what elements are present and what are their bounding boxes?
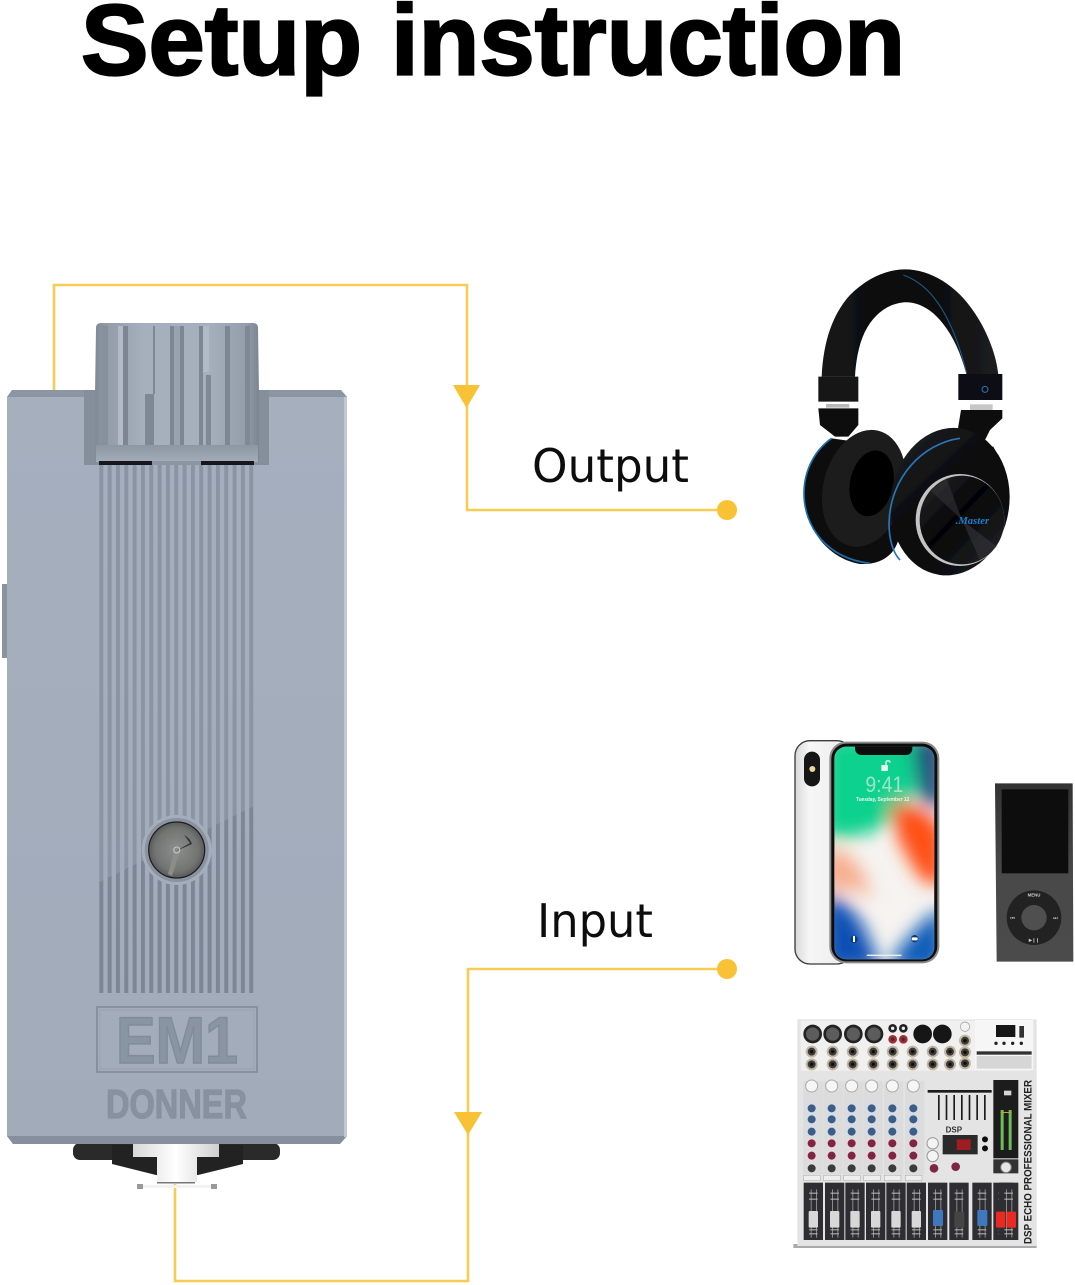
rear connector panel — [801, 1020, 1033, 1071]
arrow: input connector — [175, 959, 737, 1281]
click wheel — [1007, 890, 1061, 945]
center effects section — [927, 1090, 992, 1173]
device: EM1 amplifier — [2, 323, 347, 1189]
jack and nuts — [73, 1143, 280, 1189]
home bar — [867, 955, 902, 956]
arrow: output connector — [54, 285, 737, 520]
brand mark: .Master — [956, 516, 990, 527]
side button — [2, 584, 7, 658]
title — [81, 0, 905, 96]
rear camera — [804, 752, 820, 786]
left ear cup — [804, 421, 918, 564]
DONNER logo: DONNER — [106, 1081, 247, 1127]
label: output: Output — [532, 439, 689, 493]
lock screen clock: 9:41 — [865, 772, 903, 797]
phone back — [795, 741, 852, 964]
notch — [855, 746, 912, 755]
lock icon — [886, 761, 890, 765]
click wheel: ▶❙❙ — [1029, 937, 1039, 942]
click wheel: ⏮ — [1010, 915, 1015, 921]
click wheel: MENU — [1028, 893, 1040, 898]
click wheel: ⏭ — [1053, 915, 1058, 921]
knob — [95, 323, 259, 465]
player screen — [1002, 789, 1068, 873]
right ear cup — [881, 420, 1019, 583]
power button — [142, 815, 212, 885]
audio mixer — [793, 1019, 1037, 1248]
body shell — [7, 390, 347, 1144]
headband — [822, 269, 998, 377]
main meter panel — [993, 1080, 1018, 1173]
lock screen date: Tuesday, September 12 — [856, 797, 909, 803]
vent stripes — [99, 465, 254, 993]
smartphone — [795, 737, 943, 970]
mixer side label: DSP ECHO PROFESSIONAL MIXER — [1023, 1080, 1035, 1244]
right yoke — [957, 374, 1002, 447]
left yoke — [818, 377, 858, 437]
headphones — [804, 269, 1019, 583]
phone front — [829, 742, 939, 963]
screen wallpaper — [834, 746, 934, 960]
channel strips — [803, 1080, 924, 1181]
mixer chassis — [797, 1019, 1037, 1246]
knob recess — [84, 390, 269, 465]
center effects section: DSP — [946, 1126, 963, 1135]
media player — [995, 783, 1073, 962]
player body — [995, 783, 1073, 962]
label: input: Input — [537, 894, 653, 948]
mixer shadow — [793, 1244, 1037, 1248]
fader strips — [804, 1183, 1018, 1240]
EM1 badge: EM1 — [116, 1003, 238, 1077]
